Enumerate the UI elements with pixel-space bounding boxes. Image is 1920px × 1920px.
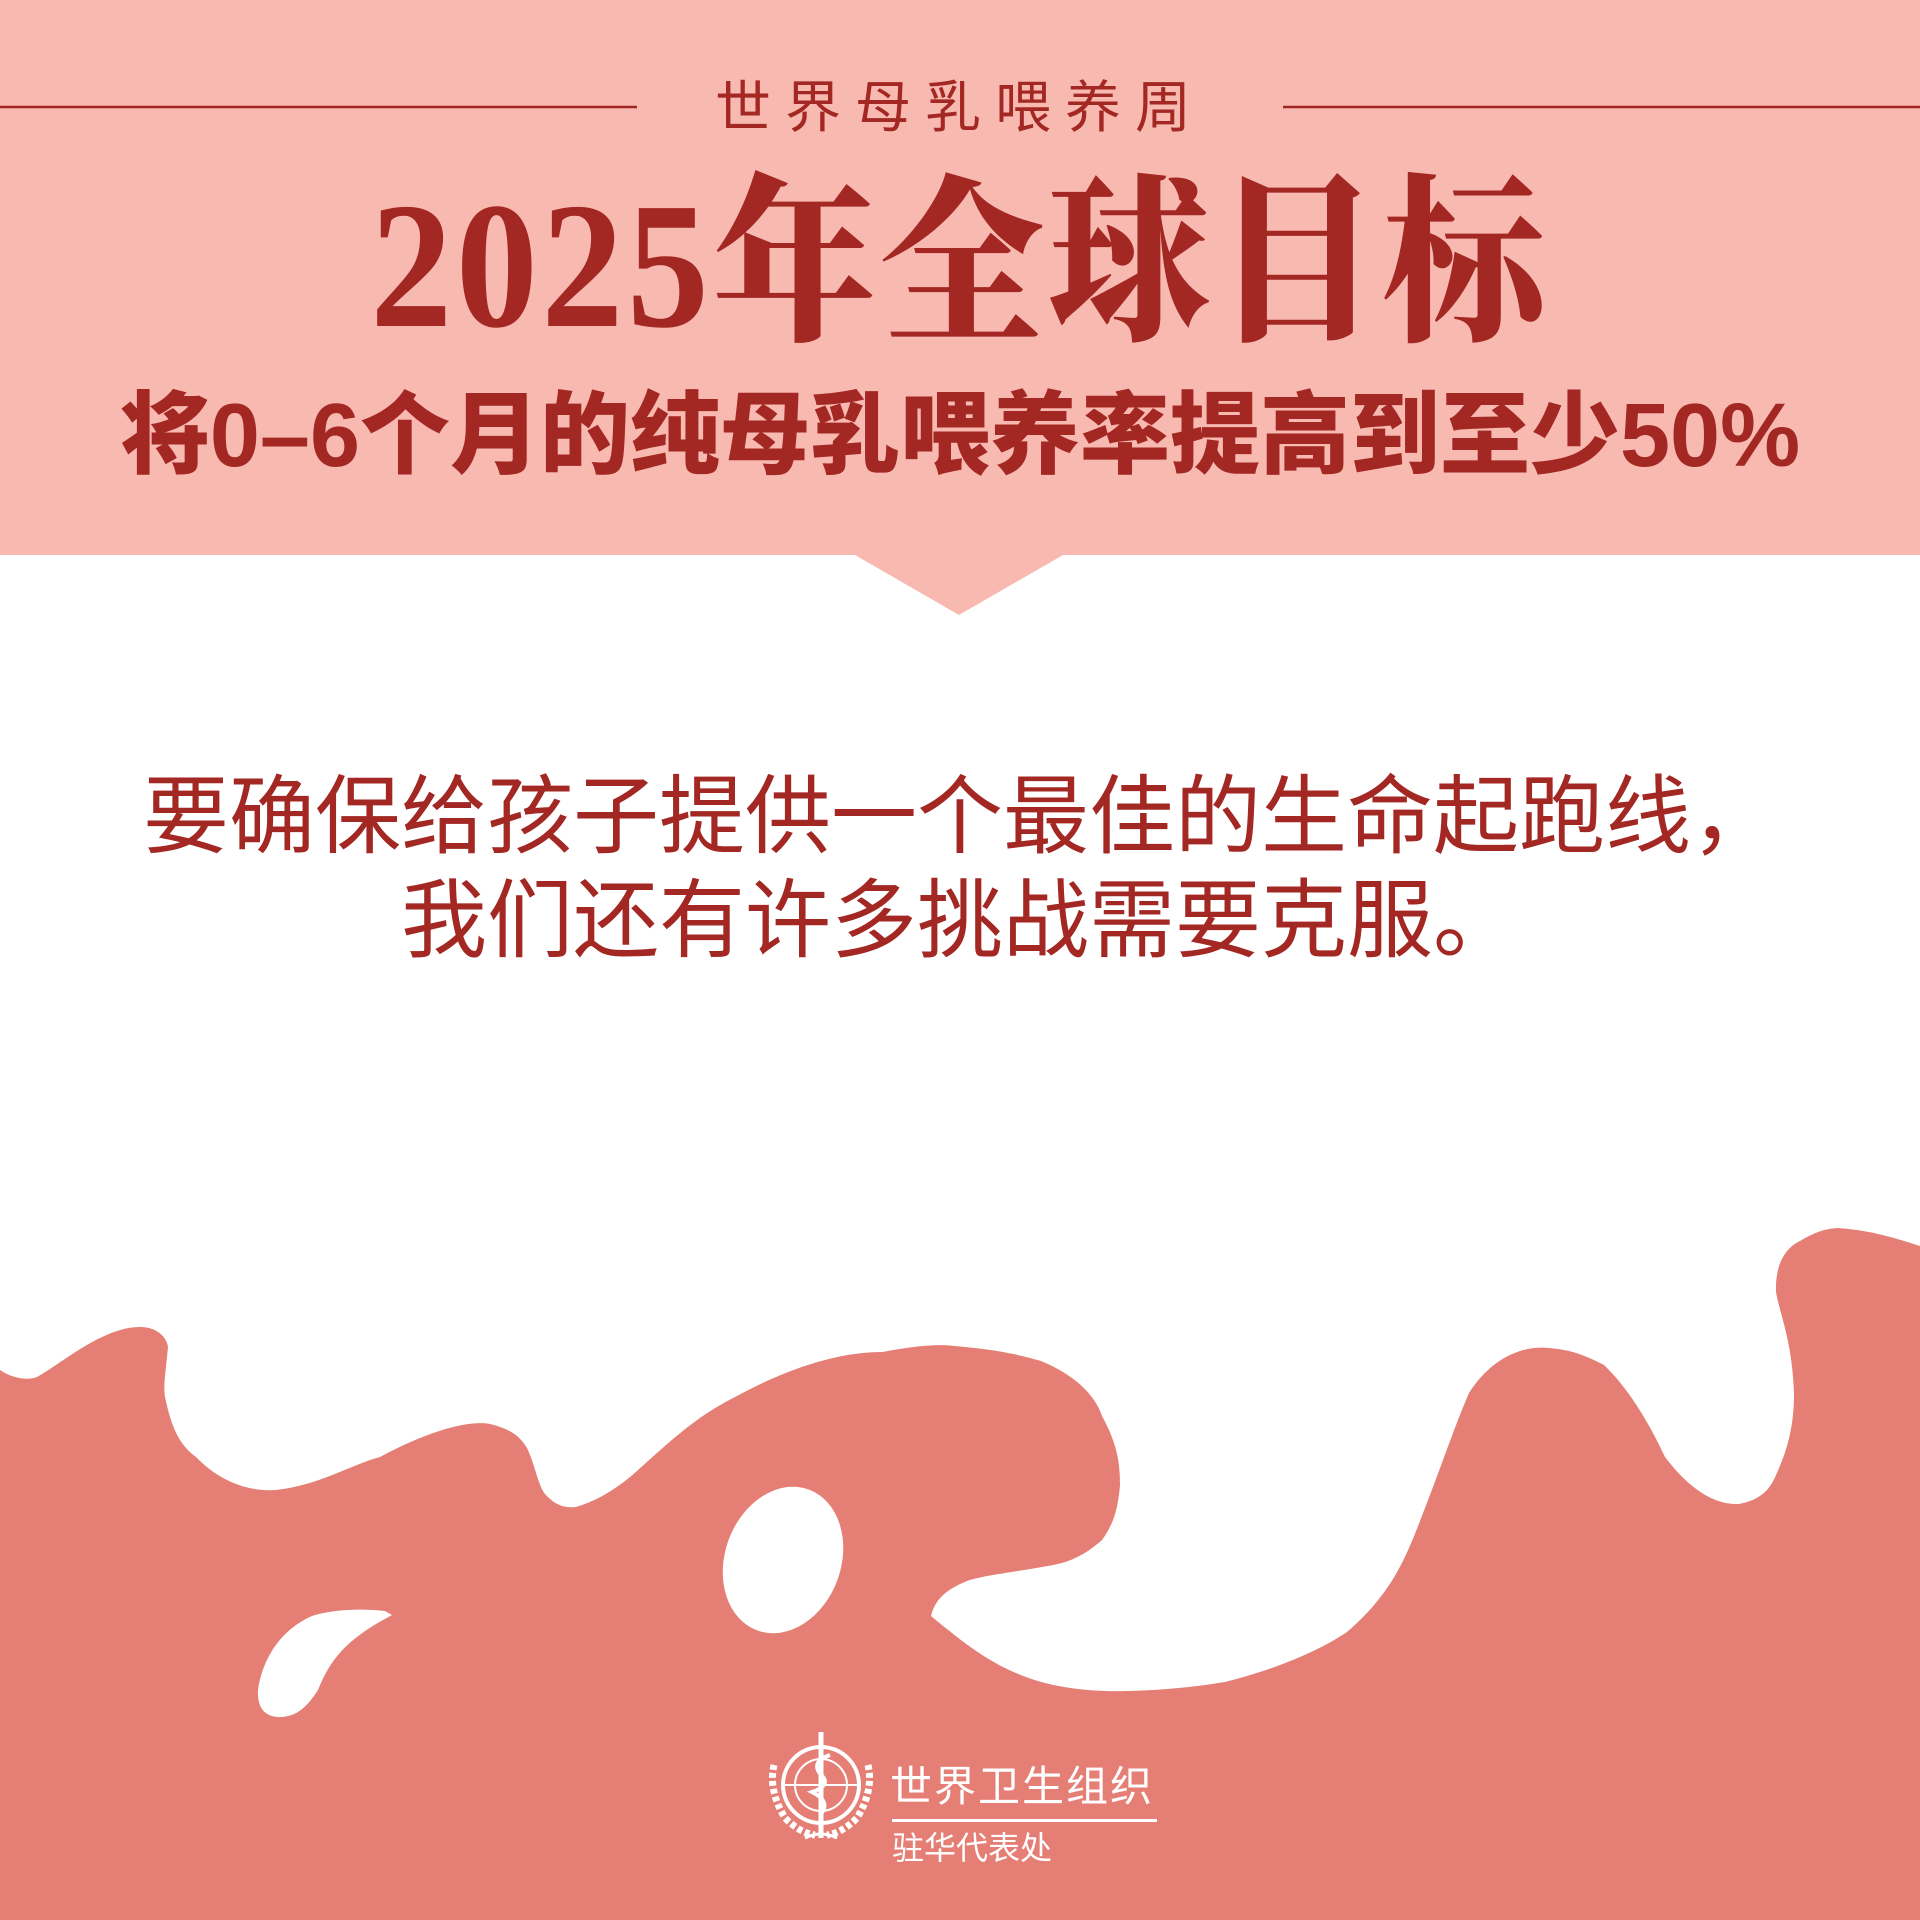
kicker heading: 世界母乳喂养周 — [715, 76, 1205, 139]
icon: WHO emblem — [768, 1732, 874, 1840]
logo text: 世界卫生组织 — [890, 1763, 1154, 1810]
body text: 我们还有许多挑战需要克服。 — [401, 873, 1519, 969]
wave: milk splash — [0, 1228, 1920, 1920]
milk drop — [258, 1610, 392, 1717]
body text: 要确保给孩子提供一个最佳的生命起跑线， — [143, 769, 1777, 865]
title: 2025年全球目标 — [370, 166, 1550, 365]
header panel — [0, 0, 1920, 615]
WHO logo: 驻华代表处 — [892, 1830, 1052, 1866]
body text — [143, 769, 1777, 969]
WHO logo — [768, 1732, 1157, 1866]
milk oval — [703, 1470, 863, 1650]
subtitle: 将0–6个月的纯母乳喂养率提高到至少50% — [120, 386, 1800, 486]
